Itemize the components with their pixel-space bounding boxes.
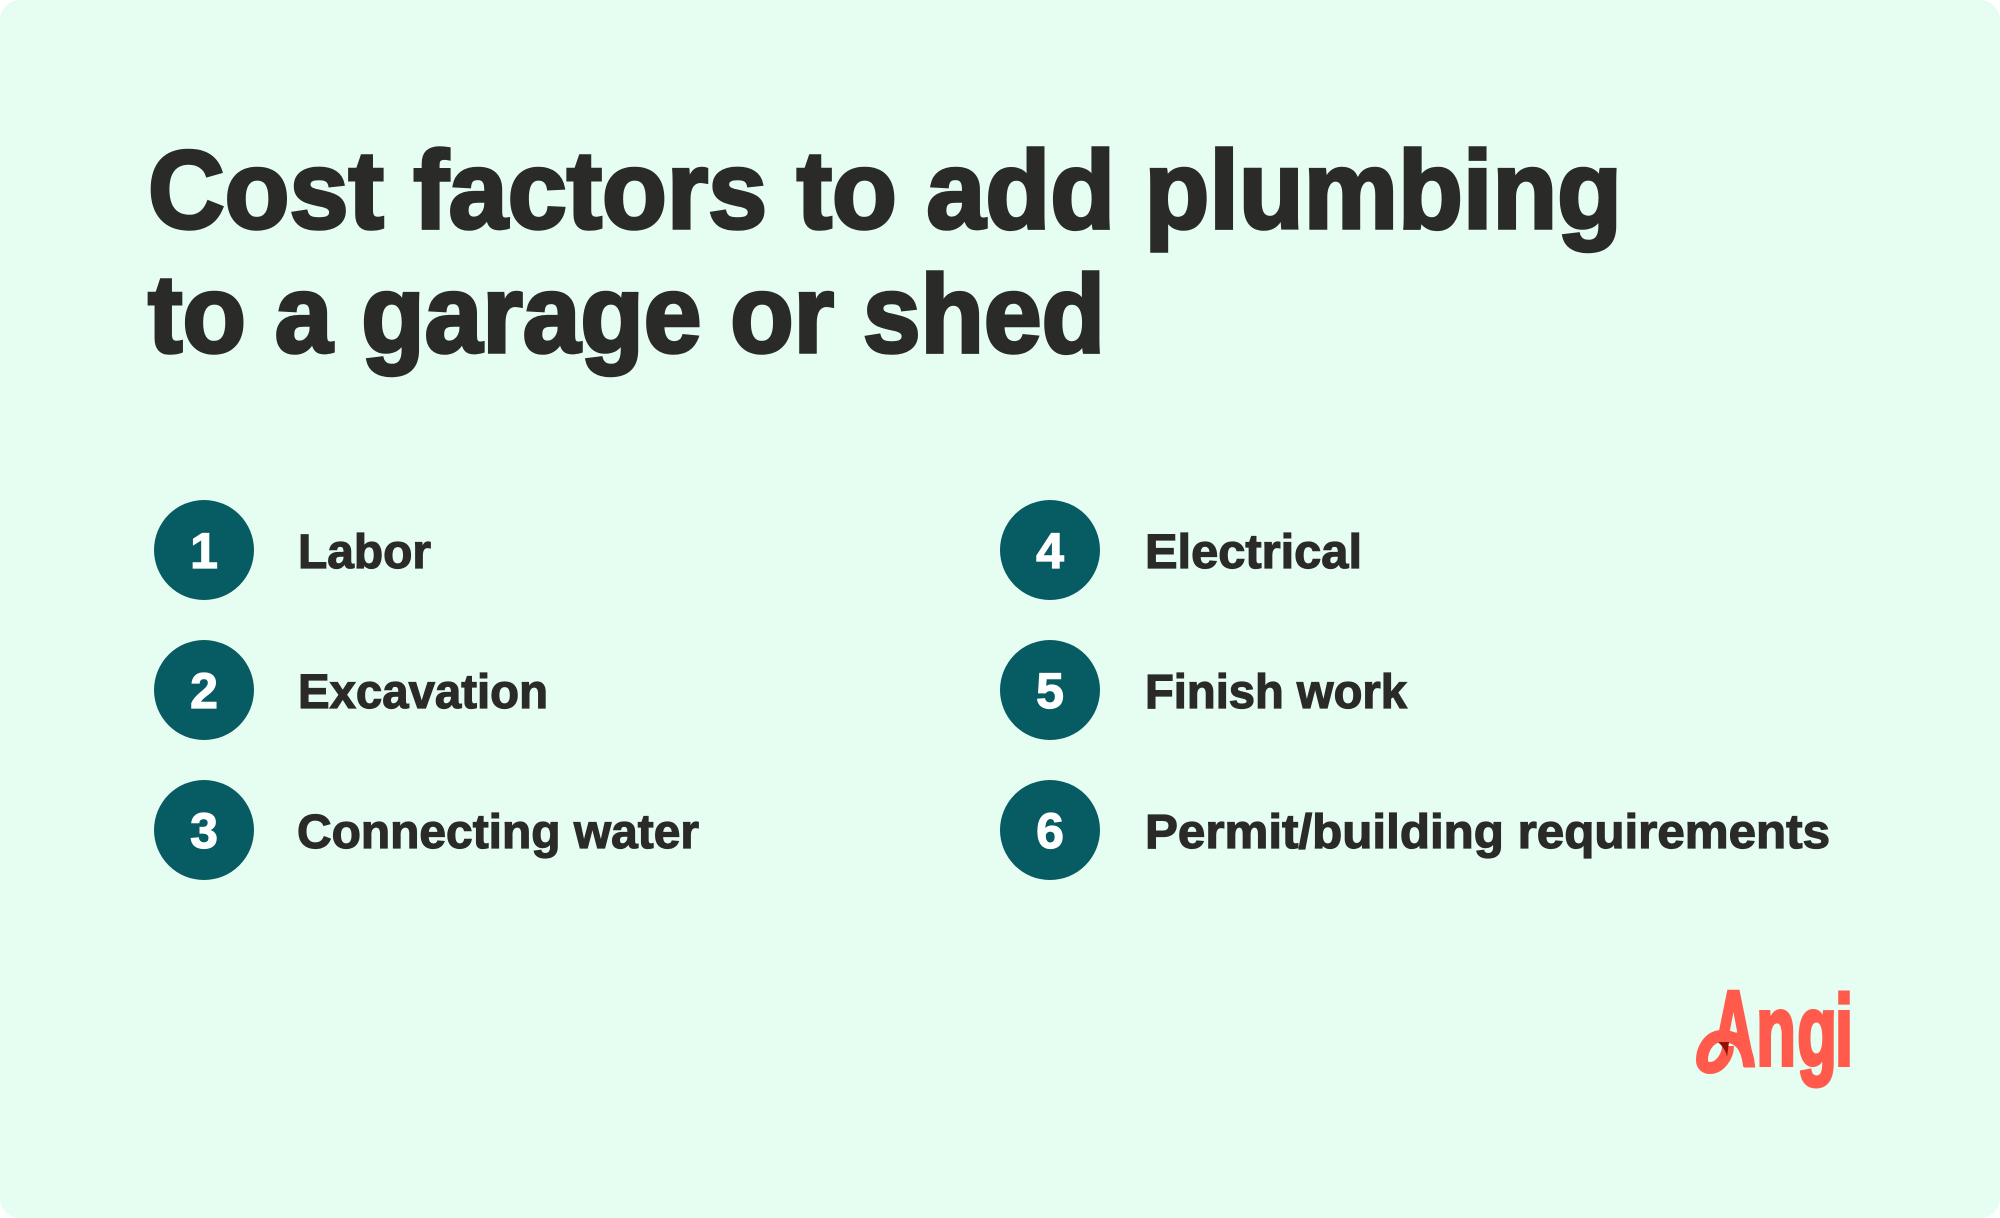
list item 2: Excavation: [154, 640, 548, 740]
list item 5: Finish work: 5: [1036, 663, 1064, 719]
list item 2: Excavation: Excavation: [298, 666, 548, 719]
list item 6: Permit/building requirements: [1000, 780, 1830, 880]
list item 5: Finish work: [1000, 640, 1407, 740]
list item 4: Electrical: Electrical: [1145, 526, 1362, 579]
title: to a garage or shed: [148, 253, 1105, 376]
list item 6: Permit/building requirements: 6: [1036, 803, 1064, 859]
logo: Angi: [1696, 990, 1850, 1088]
list item 3: Connecting water: Connecting water: [297, 806, 699, 859]
list item 3: Connecting water: [154, 780, 699, 880]
title: [148, 129, 1622, 376]
logo: Angi: A: [1712, 970, 1755, 1088]
list item 4: Electrical: [1000, 500, 1362, 600]
list item 6: Permit/building requirements: Permit/building requirements: [1145, 806, 1830, 859]
list item 5: Finish work: Finish work: [1145, 666, 1407, 719]
list item 1: Labor: 1: [190, 523, 218, 579]
list item 1: Labor: Labor: [298, 526, 431, 579]
list item 1: Labor: [154, 500, 431, 600]
list item 4: Electrical: 4: [1036, 523, 1064, 579]
list item 2: Excavation: 2: [190, 663, 218, 719]
logo: Angi: ngi: [1756, 975, 1853, 1086]
list item 3: Connecting water: 3: [190, 803, 218, 859]
title: Cost factors to add plumbing: [148, 129, 1622, 252]
